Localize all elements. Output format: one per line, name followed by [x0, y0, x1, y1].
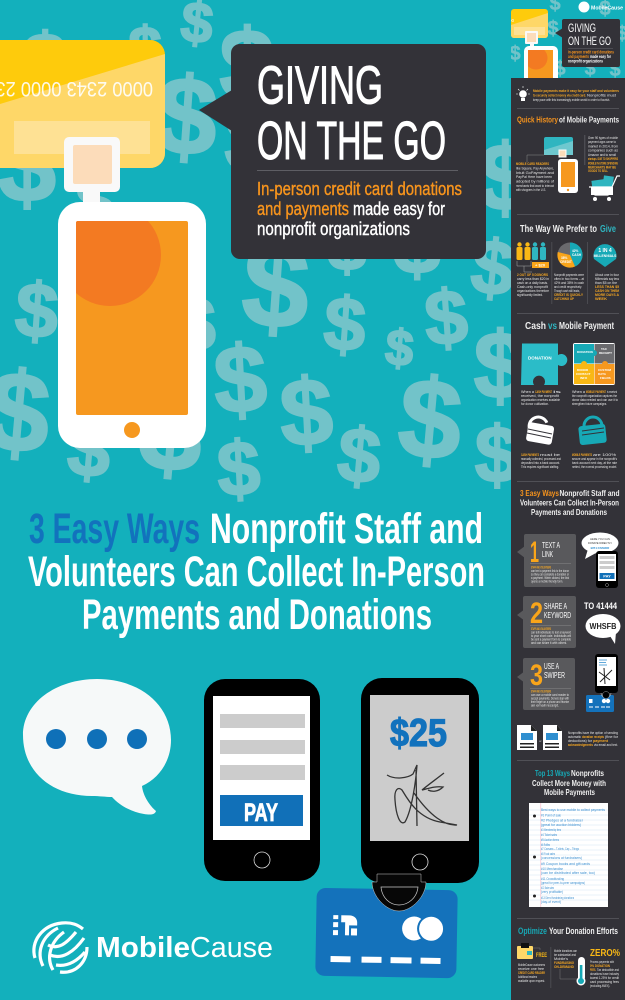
- zero percent: FEES.: [590, 968, 596, 972]
- step 2 card: STAFF AND VOLUNTEERS: [531, 627, 551, 631]
- logo: [34, 923, 273, 972]
- text: mobile payment puzzle: is received: [607, 390, 617, 394]
- text: receipts: [568, 731, 619, 747]
- free reader: CREDIT CARD READER: [518, 971, 545, 975]
- thermometer: Mobile's: [554, 957, 568, 961]
- text: receipts: deductions) for: [568, 739, 593, 743]
- smartphone: [58, 202, 206, 448]
- background dollar signs: $: [334, 411, 384, 501]
- text: mobile apps: GOODS TO SELL: [588, 169, 608, 173]
- pie chart: [557, 242, 583, 268]
- step 2 card: to your short code. Individuals will: [531, 634, 571, 638]
- step 2 keyword: TO 41444: [584, 601, 618, 612]
- notebook list: #9 Coupon books and gift cards: [541, 862, 590, 866]
- notebook list: [529, 803, 608, 907]
- heading: 3 easy ways: [28, 505, 485, 639]
- text: donors: 2 OUT OF 5 DONORS: [517, 273, 549, 277]
- thermometer: Mobile donations can: [554, 949, 577, 953]
- icons: receipts: or: [539, 739, 542, 743]
- background dollar signs: $: [422, 274, 471, 362]
- icon: four puzzle pieces: CONTACT: [576, 372, 591, 376]
- text: mobile card readers: with shoppers in the U.S.: [516, 188, 546, 192]
- icon: 1 in 4 pin: 1 IN 4: [598, 248, 612, 254]
- text: millennials: LESS THAN $5: [595, 285, 619, 289]
- notebook list: #10 Merchandise: [541, 867, 563, 871]
- step 2 card: 2: [530, 597, 543, 630]
- icon: light bulb: [516, 86, 530, 101]
- text: millennials: [595, 273, 620, 301]
- thumbnail header: $: [547, 18, 559, 40]
- text: millennials: Millennials say less: [595, 277, 619, 281]
- step 1 bubble and phone: PAY: [603, 574, 611, 578]
- heading: quick history: [517, 116, 619, 124]
- notebook list: #4 Ticket sales: [541, 833, 557, 837]
- reader dongle: [372, 874, 426, 911]
- text: receipts: (fine for: [605, 735, 619, 739]
- icon: donors people: + $20: [535, 262, 546, 268]
- title box: [199, 44, 486, 259]
- step 1 bubble and phone: BIT.LY/MHDR: [591, 546, 610, 550]
- text: receipts: acknowledgments: [568, 743, 593, 747]
- text: mobile apps: Amazon and to small: [588, 153, 616, 157]
- background dollar signs: $: [393, 197, 441, 292]
- step 1 bubble and phone: HERE YOU CAN: [590, 537, 610, 541]
- zero percent: Tax deductible and: [597, 968, 619, 972]
- intro text: Nonprofits must: [587, 94, 616, 98]
- background dollar signs: $: [479, 125, 531, 231]
- text: mobile payment puzzle: donor data needed and can use it to: [572, 398, 618, 402]
- step 3 card: can use a mobile card reader to: [531, 693, 569, 697]
- subtitle: [257, 179, 462, 239]
- step 1 bubble and phone: [582, 532, 618, 588]
- free reader: [517, 943, 547, 983]
- text: mobile card readers: [516, 162, 554, 192]
- thermometer: be substantial and: [554, 953, 576, 957]
- text: cash payment puzzle: is: [553, 390, 562, 394]
- step 1 card: [517, 534, 576, 587]
- text: payments share: CATCHING UP: [554, 297, 575, 301]
- thumbnail header: $: [554, 58, 566, 80]
- background dollar signs: $: [383, 319, 416, 377]
- thermometer: FUNDRAISING: [554, 961, 574, 965]
- text: cash payment puzzle: When a: [521, 390, 534, 394]
- step 3 card: STAFF AND VOLUNTEERS: [531, 690, 551, 694]
- pie chart: CREDIT: [560, 260, 572, 264]
- background dollar signs: $: [76, 162, 114, 240]
- text: cash payment puzzle: CASH PAYMENT: [535, 390, 553, 394]
- free reader: Additional readers: [518, 975, 537, 979]
- text: cash payment puzzle: received, the nonprofit: [521, 394, 559, 398]
- step 2 keyword: WHSFB: [590, 622, 617, 631]
- step 3 card: USE A: [544, 662, 559, 671]
- notebook list: #8 Food sales: [541, 852, 555, 856]
- text: payments share: Though cash still leads,: [554, 289, 580, 293]
- logo: Cause: [190, 932, 273, 964]
- heading: top 13 ways: Top 13 Ways: [535, 768, 570, 778]
- title: ON THE GO: [257, 111, 446, 171]
- icon: four puzzle pieces: CUSTOM: [598, 368, 611, 372]
- text: mobile payment puzzle: [572, 390, 618, 406]
- heading: 3 easy ways thumbnail: [520, 488, 620, 517]
- thumbnail header: $: [584, 58, 596, 80]
- background dollar signs: $: [277, 359, 335, 467]
- title: GIVING: [257, 56, 383, 116]
- background dollar signs: $: [211, 326, 269, 434]
- subtitle: In-person credit card donations: [257, 179, 462, 199]
- text: cash fee: CASH PAYMENTS: [521, 453, 539, 457]
- text: mobile card readers: adopted by millions of: [516, 180, 554, 184]
- step 3 card: accept payments. Donors sign with: [531, 696, 569, 700]
- icon: four puzzle pieces: RECEIPT: [599, 351, 612, 355]
- icon: phone with pay form: [204, 679, 320, 881]
- text: mobile payment puzzle: When a: [572, 390, 585, 394]
- background dollar signs: $: [135, 366, 208, 497]
- text: mobile apps: Over 90 types of mobile: [588, 136, 618, 140]
- step 1 bubble and phone: DONATE DIRECTLY: [588, 541, 612, 545]
- icon: four puzzle pieces: [573, 343, 615, 385]
- text: cash fee: deposited into a bank account.: [521, 461, 560, 465]
- zero percent: [590, 947, 621, 988]
- step 1 card: TEXT A: [542, 541, 560, 550]
- background dollar signs: $: [215, 425, 262, 513]
- icon: four puzzle pieces: TAX: [601, 347, 607, 351]
- thumbnail header: $: [609, 59, 621, 81]
- text: mobile apps: [588, 136, 618, 173]
- background dollar signs: $: [219, 9, 275, 121]
- notebook list: #3 Membership fees: [541, 828, 561, 832]
- heading: 3 easy ways: Nonprofit Staff and: [210, 505, 483, 553]
- thumbnail header: nonprofit organizations: [568, 58, 603, 64]
- notebook list: #7 Canvass – T-shirts, Cap – Things: [541, 847, 579, 851]
- notebook list: (can be distributed after sale, too): [541, 871, 595, 875]
- heading: optimize: Optimize: [518, 926, 547, 937]
- step 3 card: SWIPER: [544, 671, 565, 680]
- logo: Mobile: [96, 932, 190, 964]
- step 1 card: LINK: [542, 550, 553, 559]
- free reader: receive one free: [518, 967, 544, 971]
- step 2 card: [517, 596, 576, 648]
- text: payments share: 42% and 38% in cash: [554, 281, 584, 285]
- notebook list: (great for auction bidders): [541, 823, 581, 827]
- subtitle: nonprofit organizations: [257, 219, 410, 239]
- text: millennials: MORE DAYS A: [595, 293, 620, 297]
- text: mobile card readers: Intuit GoPayment and: [516, 171, 554, 175]
- thumbnail header: made easy for: [590, 54, 611, 59]
- background dollar signs: $: [475, 410, 519, 499]
- text: receipts: automatic: [568, 735, 581, 739]
- logo globe: [34, 923, 87, 972]
- heading: 3 easy ways: Payments and Donations: [82, 591, 432, 639]
- icons: receipts: [517, 725, 562, 750]
- zero percent: 0% DONATION: [590, 964, 610, 968]
- text: mobile payment puzzle: MOBILE PAYMENT: [586, 390, 607, 394]
- background dollar signs: $: [474, 313, 526, 419]
- text: mobile card readers: MOBILE CARD READERS: [516, 162, 550, 166]
- icon: four puzzle pieces: DATA: [598, 372, 607, 376]
- background dollar signs: [0, 0, 531, 513]
- icon: four puzzle pieces: DONOR: [577, 368, 589, 372]
- free reader: FREE: [536, 952, 547, 959]
- icon: phone with pay form: PAY: [244, 799, 278, 827]
- background dollar signs: $: [394, 354, 467, 485]
- text: donors: cash on a daily basis.: [517, 281, 548, 285]
- text: millennials: CASH ON THEM: [595, 289, 619, 293]
- icon: four puzzle pieces: INFO: [580, 376, 588, 380]
- icon: four puzzle pieces: FIELDS: [600, 376, 611, 380]
- background dollar signs: $: [12, 267, 61, 355]
- notebook list: #5 Auction items: [541, 838, 559, 842]
- notebook list: #11 Crowdfunding: [541, 877, 564, 881]
- text: receipts: donation receipts: [582, 735, 604, 739]
- step 3 card: their finger on a phone and receive: [531, 700, 569, 704]
- icon: blue credit card: [315, 888, 458, 978]
- icon: 1 in 4 pin: MILLENNIALS: [594, 254, 617, 258]
- text: mobile fee: [572, 453, 617, 469]
- text: mobile fee: MOBILE PAYMENTS: [572, 453, 592, 457]
- step 2 card: and can share it with others.: [531, 641, 567, 645]
- text: receipts: payment: [593, 739, 609, 743]
- text: cash fee: must be: [540, 453, 560, 457]
- background dollar signs: $: [238, 217, 314, 355]
- zero percent: (excluding AMEX).: [590, 984, 610, 988]
- icon: closed teal lock: [578, 417, 607, 445]
- icon: speech bubble: [23, 679, 171, 815]
- intro text: to securely collect money via credit card.: [533, 94, 586, 98]
- icon: four puzzle pieces: DONATION: [577, 350, 593, 354]
- thermometer: [554, 949, 586, 986]
- text: receipts: via email and text.: [594, 743, 618, 747]
- notebook list: (very profitable): [541, 890, 563, 894]
- signature: [387, 765, 457, 826]
- icon: teal puzzle piece: DONATION: [528, 356, 552, 360]
- text: millennials: WEEK: [595, 297, 608, 301]
- text: mobile payment puzzle: strengthen future campaigns.: [572, 402, 607, 406]
- heading: optimize: [518, 926, 618, 937]
- notebook list: #12 Bake sales: [541, 886, 554, 890]
- title: [257, 56, 446, 171]
- background dollar signs: $: [467, 223, 519, 313]
- panel: thumbnail column: [511, 0, 625, 1000]
- text: cash payment puzzle: [521, 390, 562, 406]
- heading: top 13 ways: Mobile Payments: [544, 787, 595, 797]
- heading: cash vs mobile payment: Cash: [525, 321, 546, 332]
- step 2 card: KEYWORD: [544, 611, 571, 620]
- step 2 card: SHARE A: [544, 602, 567, 611]
- step 1 card: STAFF AND VOLUNTEERS: [531, 566, 551, 570]
- heading: quick history: Quick History: [517, 116, 558, 124]
- card reader: [64, 137, 120, 206]
- zero percent: card processing fees: [590, 980, 619, 984]
- step 3 card: 3: [530, 659, 543, 692]
- notebook list: #13 Direct fundraising donations: [541, 896, 574, 900]
- step 1 card: 1: [530, 536, 539, 569]
- background dollar signs: $: [328, 207, 366, 285]
- notebook list: #6 Raffles: [541, 843, 550, 847]
- background dollar signs: $: [321, 281, 369, 367]
- heading: cash vs mobile payment: vs: [548, 321, 557, 332]
- text: mobile fee: secure and appear in the nonprofit's: [572, 457, 617, 461]
- notebook list: (great for peer-to-peer campaigns): [541, 881, 585, 885]
- background dollar signs: $: [64, 405, 114, 495]
- step 1 card: can text a payment link to the donor: [531, 569, 570, 573]
- heading: 3 easy ways thumbnail: 3 Easy Ways: [520, 488, 559, 498]
- icon: 1 in 4 pin: [594, 244, 617, 267]
- text: payments share: CREDIT IS QUICKLY: [554, 293, 584, 297]
- icon: open white lock: [526, 416, 555, 445]
- intro text: [516, 86, 619, 102]
- text: mobile card readers: merchants that want to interact: [516, 184, 554, 188]
- text: mobile card readers: PayPal Here have been: [516, 175, 552, 179]
- heading: the way we prefer to give: The Way We Prefer to: [520, 224, 597, 235]
- text: payments share: often in two forms – at: [554, 277, 584, 281]
- pie chart: 38%: [561, 256, 568, 260]
- heading: cash vs mobile payment: [525, 321, 614, 332]
- text: cash payment puzzle: for donor cultivation.: [521, 402, 549, 406]
- text: mobile apps: payment apps came to: [588, 140, 616, 144]
- text: mobile apps: companies such as: [588, 148, 618, 152]
- notebook list: #2 Pledges at a fundraiser: [541, 818, 584, 822]
- step 2 card: be sent a payment form to complete: [531, 638, 571, 642]
- icon: phone with signature and reader: $25: [390, 712, 447, 755]
- text: mobile card readers: like Square, Pay Anywhere,: [516, 166, 554, 170]
- text: cash payment puzzle: organization receives available: [521, 398, 560, 402]
- text: receipts: Nonprofits have the option of sending: [568, 731, 618, 735]
- pie chart: 42%: [572, 249, 579, 253]
- thermometer: ON-DEMAND: [554, 965, 575, 969]
- step 2 keyword: [584, 601, 620, 644]
- text: payments share: Nonprofit payments were: [554, 273, 584, 277]
- step 3 phone and card: [586, 654, 618, 712]
- step 1 card: so they can complete a donation or: [531, 572, 570, 576]
- text: millennials: than $5 on the: [595, 281, 617, 285]
- text: cash fee: This requires significant staffing.: [521, 465, 559, 469]
- text: mobile apps: market in 2014, from: [588, 144, 618, 148]
- zero percent: Process payments with: [590, 960, 614, 964]
- notebook list: (day-of event): [541, 900, 561, 904]
- zero percent: lowest 1.25% for credit: [590, 976, 619, 980]
- step 3 card: [517, 658, 575, 710]
- free reader: MobileCause customers: [518, 963, 545, 967]
- text: donors: [517, 273, 549, 297]
- text: donors: Cash-only nonprofit: [517, 285, 548, 289]
- notebook list: Best ways to use mobile to collect payments: [541, 808, 605, 812]
- thumbnail header: 0000 2343 0000: [482, 18, 514, 23]
- text: cash fee: manually collected, processed and: [521, 457, 561, 461]
- thumbnail header: MobileCause: [591, 6, 623, 12]
- background dollar signs: $: [224, 82, 280, 194]
- background dollar signs: $: [128, 15, 162, 82]
- text: donors: organizations therefore: [517, 289, 549, 293]
- step 3 card: an email receipt.: [531, 704, 559, 708]
- heading: 3 easy ways: 3 Easy Ways: [29, 505, 200, 553]
- text: payments share: [554, 273, 584, 301]
- step 1 card: a payment. When clicked, the link: [531, 576, 569, 580]
- thumbnail header: and payments: [568, 54, 589, 59]
- thumbnail header: $: [509, 43, 521, 65]
- text: mobile fee: are 100%: [593, 453, 616, 457]
- text: mobile apps: MERCHANTS MAY BE: [588, 166, 617, 170]
- icon: donors people: [516, 242, 549, 272]
- step 2 card: can tell individuals to text a keyword: [531, 630, 571, 634]
- heading: top 13 ways: [532, 768, 606, 797]
- free reader: available upon request.: [518, 979, 545, 983]
- background dollar signs: $: [152, 53, 221, 180]
- text: payments share: and credit respectively.: [554, 285, 582, 289]
- background dollar signs: $: [174, 282, 216, 366]
- heading: top 13 ways: Nonprofits: [571, 768, 604, 778]
- text: cash fee: [521, 453, 561, 469]
- thumbnail header: GIVING: [568, 21, 596, 35]
- credit card: [0, 40, 165, 168]
- text: donors: significantly limited.: [517, 293, 543, 297]
- notebook list: (concessions at fundraisers): [541, 856, 582, 860]
- thumbnail header: [511, 0, 625, 78]
- heading: the way we prefer to give: Give: [600, 224, 616, 235]
- icon: teal puzzle piece: [521, 344, 567, 385]
- icon: shopping cart: [589, 175, 620, 201]
- subtitle: and payments: [257, 199, 349, 219]
- step 1 card: opens a mobile friendly form.: [531, 580, 563, 584]
- quick history graphic: [527, 137, 578, 193]
- zero percent: donations have industry: [590, 972, 619, 976]
- text: millennials: About one in four: [595, 273, 620, 277]
- background dollar signs: $: [23, 17, 67, 106]
- pie chart: CASH: [572, 253, 582, 257]
- card stripe: [14, 121, 150, 154]
- text: donors: carry less than $20 in: [517, 277, 549, 281]
- notebook list: #1 Point of sale: [541, 814, 561, 818]
- subtitle: made easy for: [353, 199, 445, 219]
- text: mobile fee: bank account next day, at the rate: [572, 461, 617, 465]
- icon: phone with signature and reader: [361, 678, 479, 911]
